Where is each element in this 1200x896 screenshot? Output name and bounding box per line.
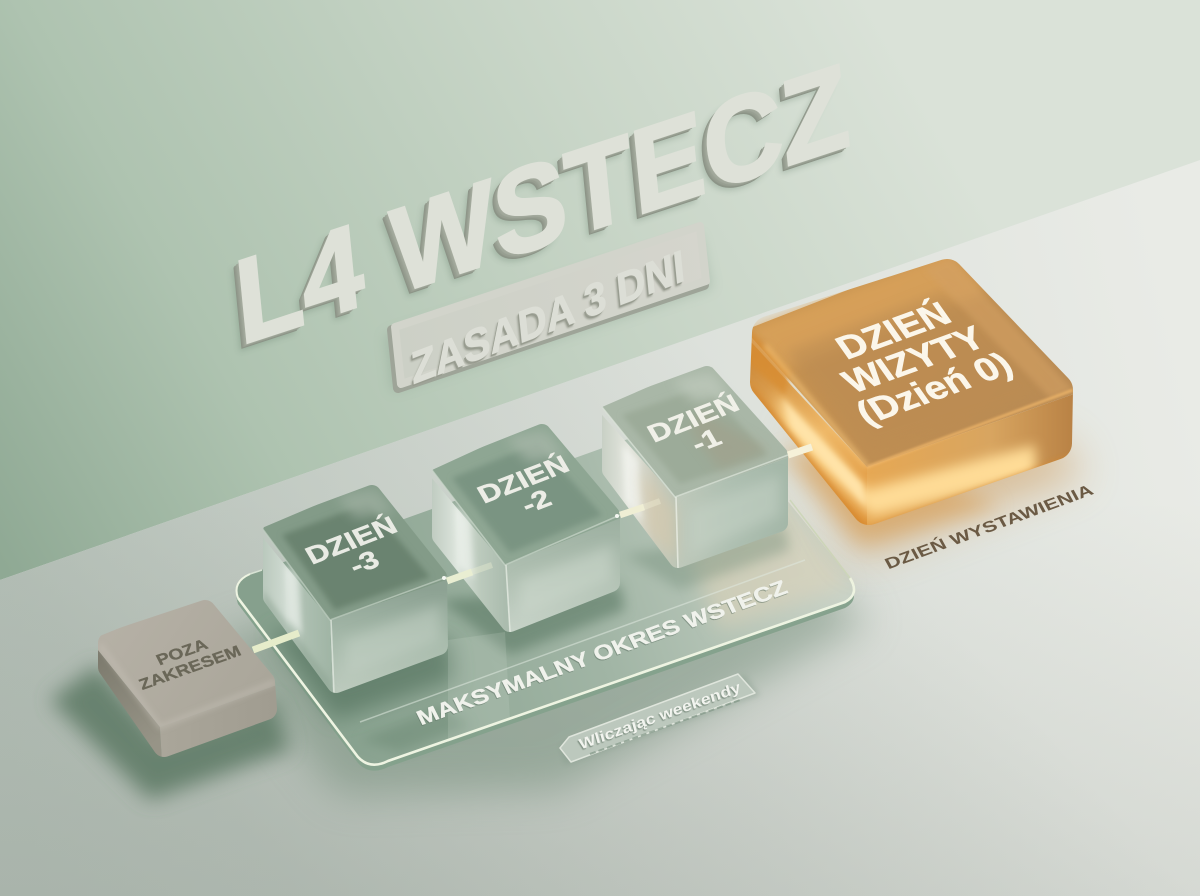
label: day -2: DZIEŃ bbox=[472, 450, 574, 509]
label: visit day bbox=[829, 296, 1020, 432]
pill: rule plate bbox=[385, 226, 712, 392]
label: out of range: ZAKRESEM bbox=[136, 642, 244, 693]
label: day -1: DZIEŃ bbox=[642, 389, 744, 448]
glass cube: day -3 bbox=[263, 485, 448, 693]
glass cube: day -2 bbox=[432, 424, 620, 632]
grey block: out of range bbox=[98, 600, 277, 757]
label: visit day: WIZYTY bbox=[835, 319, 993, 401]
label: day -2: -2 bbox=[516, 484, 556, 519]
label: day -1: -1 bbox=[686, 423, 726, 458]
subtitle: ZASADA 3 DNI bbox=[409, 241, 687, 394]
label: including weekends: Wliczając weekendy bbox=[577, 680, 742, 753]
amber block: visit day bbox=[750, 259, 1073, 525]
label: issue day: DZIEŃ WYSTAWIENIA bbox=[882, 481, 1096, 573]
label: visit day: DZIEŃ bbox=[829, 296, 959, 367]
glass chip bbox=[560, 674, 760, 765]
label: day -3: DZIEŃ bbox=[300, 511, 402, 570]
shadow of grey block bbox=[50, 665, 290, 800]
label: visit day: (Dzień 0) bbox=[849, 346, 1020, 432]
orange glow shadow on floor bbox=[780, 430, 1085, 560]
label: out of range: POZA bbox=[153, 636, 211, 669]
background: wall bbox=[0, 0, 1200, 580]
label: maximum lookback period: MAKSYMALNY OKRES WSTECZ bbox=[413, 576, 791, 730]
connector rods bbox=[253, 447, 812, 650]
title: L4 WSTECZ bbox=[230, 37, 854, 371]
glass cube: day -1 bbox=[602, 366, 788, 568]
panel: glass plate bbox=[215, 412, 870, 795]
label: day -3: -3 bbox=[344, 545, 384, 580]
